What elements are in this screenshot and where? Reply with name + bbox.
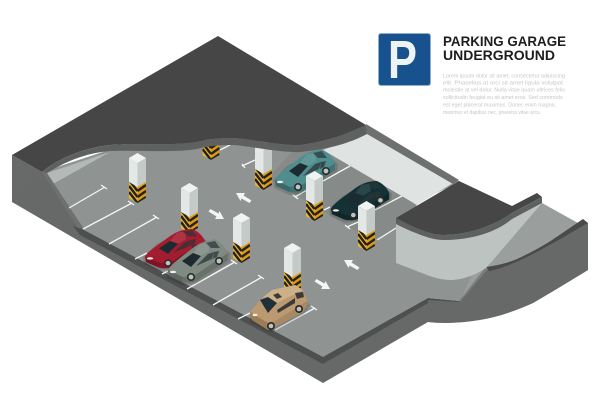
roof front lip — [42, 125, 367, 173]
body text — [443, 74, 565, 116]
lit floor wedge — [47, 152, 110, 184]
left inner wall edge — [42, 172, 84, 229]
body text: sollicitudin feugiat eu sit amet eros. Sed commodo — [443, 95, 563, 101]
direction arrows — [208, 193, 360, 289]
parking sign — [378, 30, 430, 90]
pillar near left stalls — [129, 153, 146, 203]
grey-green car — [166, 239, 231, 285]
pillar right of dark car — [358, 201, 375, 251]
title: PARKING GARAGE — [443, 33, 566, 49]
arrow: down-right 1 — [208, 209, 224, 219]
pillar hidden behind roof — [202, 110, 220, 160]
entrance roof lip — [396, 197, 542, 240]
main roof slab — [12, 36, 459, 184]
body text: Lorem ipsum dolor sit amet, consectetur adipiscing — [443, 74, 565, 80]
parking floor — [42, 120, 490, 357]
red car — [143, 228, 208, 270]
parking lines — [69, 145, 402, 330]
entrance wall — [396, 203, 542, 280]
pillar right of teal car — [306, 171, 323, 221]
pillar behind brown car — [284, 243, 301, 293]
dark green car — [329, 180, 392, 222]
roof back edge — [366, 124, 459, 184]
pillar beside grey car — [233, 213, 250, 263]
brown SUV — [250, 285, 310, 332]
pillar centre — [181, 183, 198, 233]
title: UNDERGROUND — [443, 47, 555, 63]
body text: molestie at vel dolor. Nulla vitae quam ultrices felis — [443, 88, 565, 94]
right wall dark lip — [486, 219, 588, 271]
body text: maximus et dapibus nec, pharetra vitae arcu. — [443, 110, 541, 116]
pillar by teal car — [255, 140, 272, 190]
parking sign: P — [388, 30, 417, 90]
title — [443, 33, 566, 63]
teal car — [273, 149, 338, 195]
right side ramp — [428, 203, 588, 323]
arrow: up-left 2 — [344, 260, 360, 270]
light ramp area at back — [323, 133, 453, 205]
darker parking stalls strip — [268, 148, 417, 241]
arrow: up-left 1 — [236, 193, 252, 203]
entrance roof — [396, 181, 542, 235]
arrow: down-right 2 — [314, 279, 330, 289]
body text: est eget placerat maximus. Donec enim magna, — [443, 102, 556, 108]
body text: elit. Phasellus at orci sit amet ligula volutpat — [443, 80, 564, 86]
entrance block — [396, 181, 542, 280]
right dark wall — [428, 223, 588, 323]
outer walls — [12, 155, 588, 383]
